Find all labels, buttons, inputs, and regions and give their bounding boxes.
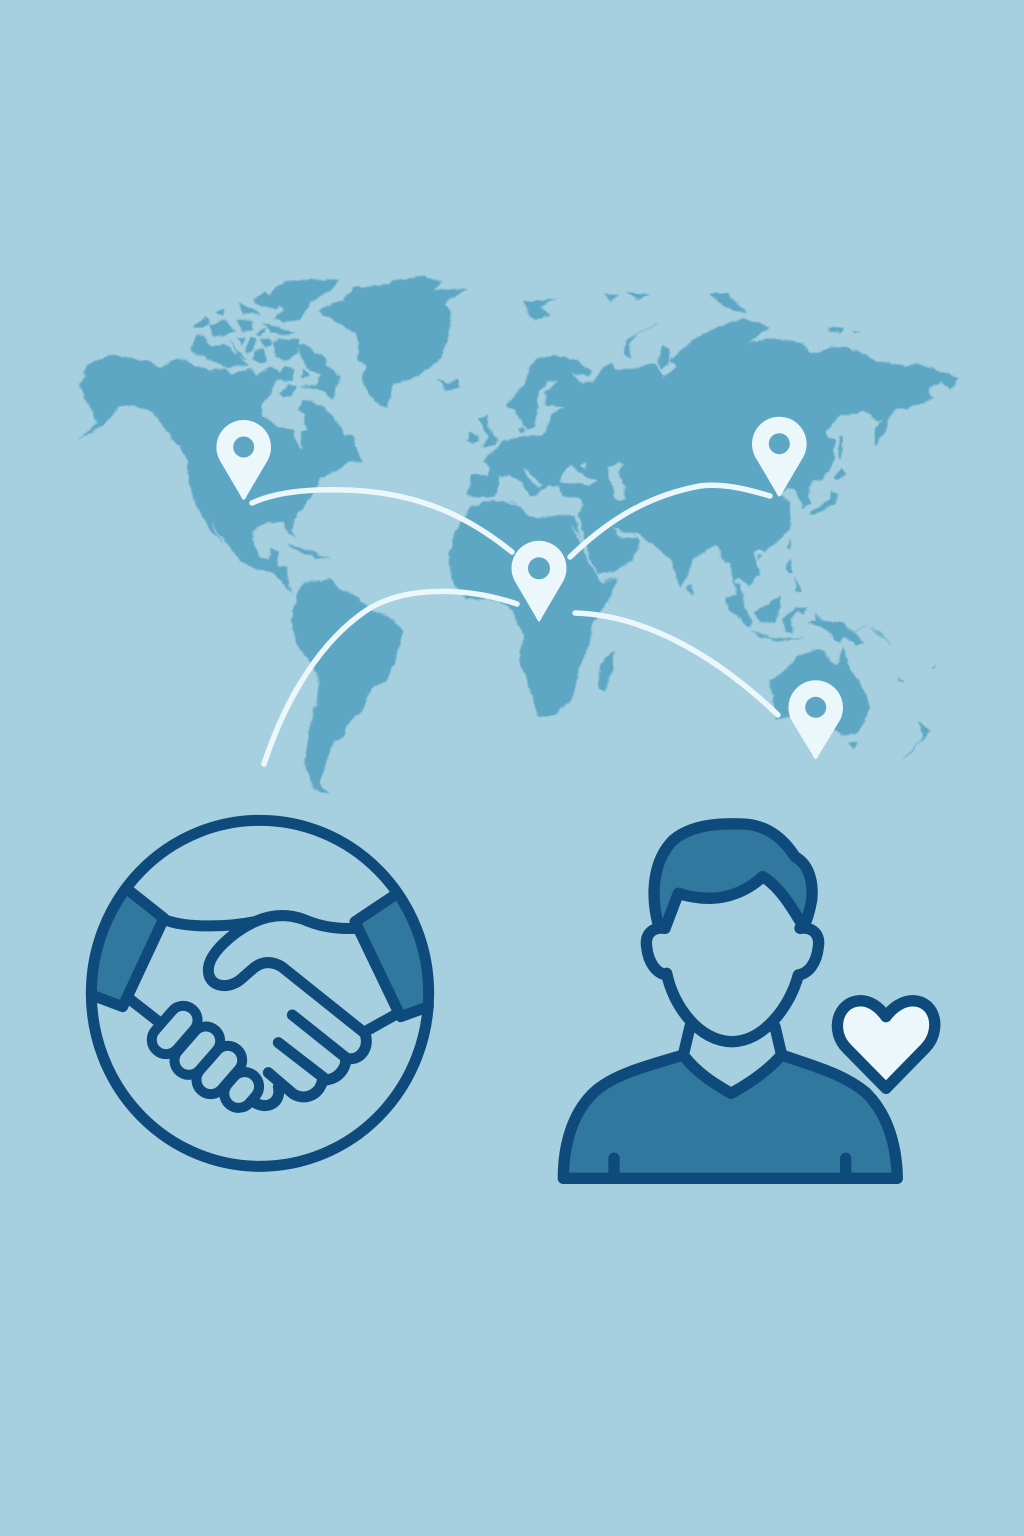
finger lines — [278, 1015, 347, 1080]
hair — [654, 824, 812, 928]
landmass: Americas and Greenland — [78, 277, 467, 794]
connection arcs — [252, 485, 778, 764]
icon: pin North America — [216, 420, 271, 500]
arc: Africa to East Asia — [570, 485, 770, 557]
upper hand outline and thumb — [167, 916, 366, 1106]
icon: pin Africa — [512, 541, 566, 622]
left hand fingers — [146, 1000, 265, 1114]
outer circle — [91, 820, 429, 1166]
sleeve marks — [614, 1158, 846, 1177]
arm lines — [130, 999, 397, 1032]
left cuff — [91, 892, 163, 1005]
torso — [563, 1055, 897, 1178]
arc: Africa to Australia — [575, 613, 778, 715]
inland seas — [477, 381, 637, 583]
world map — [78, 277, 958, 794]
icon: heart — [837, 1001, 935, 1088]
icon: pin Australia — [788, 680, 843, 759]
icon: handshake in circle — [91, 820, 429, 1166]
neck — [683, 1027, 782, 1055]
arc: South America to Africa — [264, 591, 517, 764]
landmass: Canadian Arctic islands — [190, 280, 342, 398]
arc: North America to Africa — [252, 490, 512, 552]
landmass: Eurasia, Africa and Oceania — [448, 293, 958, 760]
icon: person with heart — [563, 824, 935, 1178]
icon: pin East Asia — [752, 417, 807, 497]
face and ears — [646, 928, 819, 1042]
cuff outlines — [92, 890, 428, 1017]
British Isles and Denmark — [466, 415, 525, 447]
right cuff — [356, 896, 428, 1015]
